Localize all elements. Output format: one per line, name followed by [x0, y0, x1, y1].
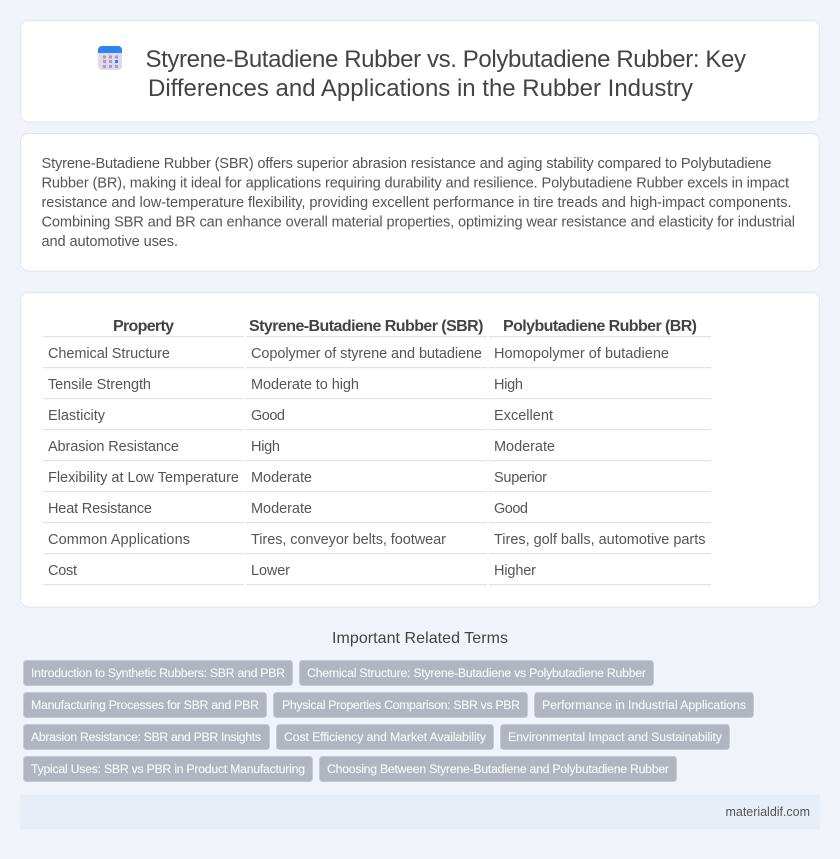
table row: common applications: Tires, conveyor belts, footwear	[251, 532, 446, 548]
tag	[24, 660, 292, 686]
table row: cost: Cost	[48, 563, 77, 579]
text block: description: and automotive uses.	[42, 234, 178, 250]
table row: heat resistance	[48, 501, 528, 517]
title: Differences and Applications in the Rubber Industry	[148, 75, 693, 102]
panel: comparison table	[20, 292, 820, 607]
heading: important related terms: Important Related Terms	[332, 630, 508, 647]
tag	[24, 692, 266, 718]
table header	[113, 318, 697, 335]
text block: description	[42, 156, 795, 250]
footer: materialdif.com	[726, 805, 810, 819]
table row: chemical structure: Homopolymer of butadiene	[494, 346, 669, 362]
table row: flexibility at low temperature: Moderate	[251, 470, 312, 486]
tag: Manufacturing Processes for SBR and PBR	[31, 698, 259, 712]
table row: flexibility at low temperature	[48, 470, 547, 486]
text block: description: Combining SBR and BR can enhance overall material properties, optimizing wear resistance and elasticity for industrial	[42, 214, 795, 230]
tag	[274, 692, 528, 718]
tag	[320, 756, 676, 782]
table row: chemical structure: Chemical Structure	[48, 346, 170, 362]
tag: Physical Properties Comparison: SBR vs PBR	[282, 698, 520, 712]
tag: Choosing Between Styrene-Butadiene and Polybutadiene Rubber	[327, 762, 669, 776]
table header: Property	[113, 318, 174, 335]
tag: Performance in Industrial Applications	[542, 698, 746, 712]
table row: elasticity: Good	[251, 408, 285, 424]
tag	[276, 724, 494, 750]
text block: description: Rubber (BR), making it ideal for applications requiring durability and resilience. Polybutadiene Rubber excels in impact	[42, 176, 789, 192]
table row: common applications	[48, 532, 706, 548]
tag	[24, 756, 312, 782]
table row: abrasion resistance: High	[251, 439, 280, 455]
table row: common applications: Tires, golf balls, automotive parts	[494, 532, 706, 548]
table row: cost: Higher	[494, 563, 536, 579]
table row: abrasion resistance	[48, 439, 555, 455]
table row: tensile strength: Moderate to high	[251, 377, 359, 393]
table row: elasticity: Elasticity	[48, 408, 106, 424]
tag	[534, 692, 754, 718]
table header: Styrene-Butadiene Rubber (SBR)	[249, 318, 484, 335]
table row: common applications: Common Applications	[48, 532, 190, 548]
related term tags	[24, 660, 754, 782]
table row: chemical structure: Copolymer of styrene and butadiene	[251, 346, 482, 362]
table row: heat resistance: Moderate	[251, 501, 312, 517]
table row: abrasion resistance: Abrasion Resistance	[48, 439, 179, 455]
table header: Polybutadiene Rubber (BR)	[503, 318, 697, 335]
panel: description	[20, 134, 820, 271]
text block: description: Styrene-Butadiene Rubber (SBR) offers superior abrasion resistance and aging stability compared to Polybutadiene	[42, 156, 772, 172]
table row: heat resistance: Heat Resistance	[48, 501, 152, 517]
tag: Chemical Structure: Styrene-Butadiene vs Polybutadiene Rubber	[307, 666, 646, 680]
footer	[20, 795, 820, 829]
table row: abrasion resistance: Moderate	[494, 439, 555, 455]
tag: Environmental Impact and Sustainability	[508, 730, 723, 744]
table row: chemical structure	[48, 346, 669, 362]
table row: cost	[48, 563, 536, 579]
icon: calendar	[98, 46, 122, 70]
table row: tensile strength: High	[494, 377, 523, 393]
tag	[500, 724, 730, 750]
tag: Typical Uses: SBR vs PBR in Product Manufacturing	[31, 762, 305, 776]
table row: tensile strength	[48, 377, 523, 393]
tag: Introduction to Synthetic Rubbers: SBR and PBR	[31, 666, 285, 680]
table row: flexibility at low temperature: Superior	[494, 470, 547, 486]
table row: heat resistance: Good	[494, 501, 528, 517]
tag	[24, 724, 270, 750]
tag: Abrasion Resistance: SBR and PBR Insights	[31, 730, 261, 744]
tag	[300, 660, 654, 686]
panel: header	[20, 20, 820, 122]
table row: elasticity: Excellent	[494, 408, 553, 424]
title: Styrene-Butadiene Rubber vs. Polybutadiene Rubber: Key	[146, 46, 746, 73]
table row: tensile strength: Tensile Strength	[48, 377, 151, 393]
table row: cost: Lower	[251, 563, 290, 579]
table row: elasticity	[48, 408, 553, 424]
tag: Cost Efficiency and Market Availability	[284, 730, 487, 744]
text block: description: resistance and low-temperature flexibility, providing excellent performance in tire treads and high-impact components.	[42, 195, 792, 211]
title	[146, 46, 746, 102]
table row: flexibility at low temperature: Flexibility at Low Temperature	[48, 470, 239, 486]
